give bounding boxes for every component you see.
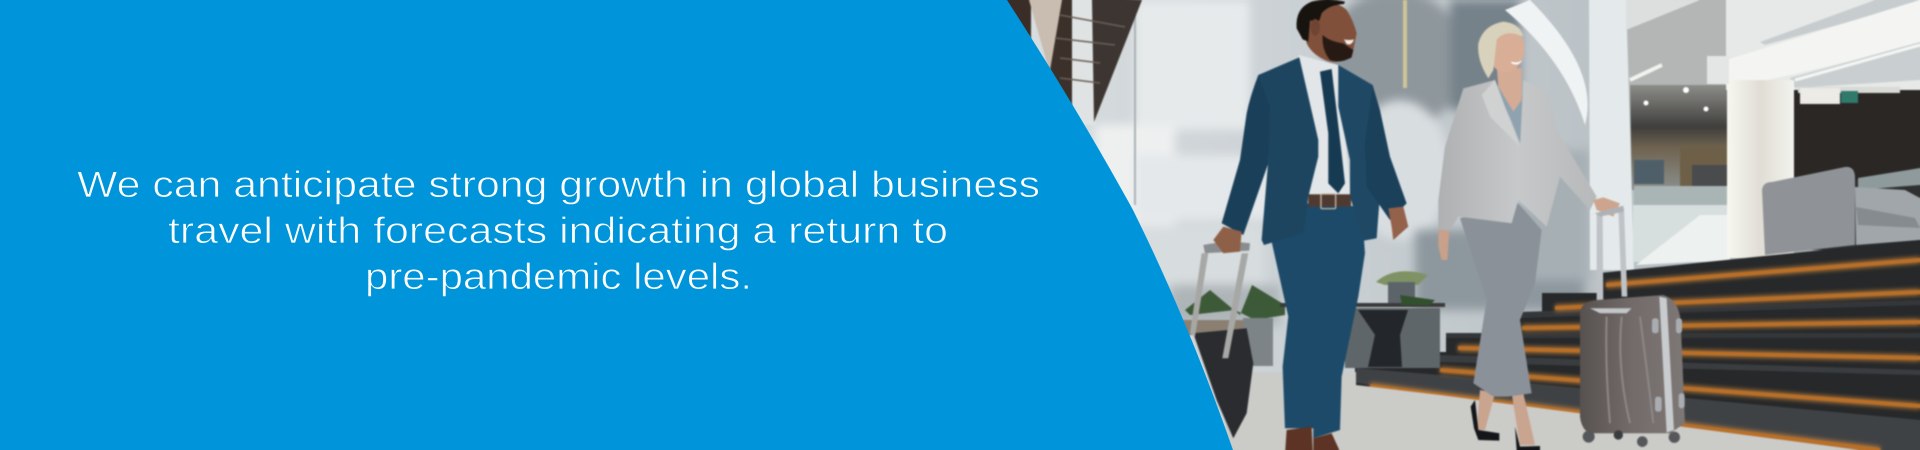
woman's suitcase xyxy=(1580,206,1685,447)
blazer xyxy=(1438,80,1597,230)
interior room behind xyxy=(1626,0,1730,265)
polished floor xyxy=(1225,372,1860,450)
glass wall reflections xyxy=(1095,0,1590,325)
blouse xyxy=(1497,85,1525,147)
man's suitcase xyxy=(1190,242,1253,438)
sleeves xyxy=(1222,75,1270,235)
lobby pillar xyxy=(1589,0,1634,270)
hands xyxy=(1593,197,1620,217)
grey sofa xyxy=(1762,167,1920,255)
neck xyxy=(1497,65,1522,112)
stairs with orange lighting xyxy=(1355,240,1920,450)
shoes xyxy=(1285,427,1339,450)
legs and shoes xyxy=(1477,390,1535,445)
jacket xyxy=(1258,57,1318,245)
trousers xyxy=(1272,203,1365,438)
shirt xyxy=(1298,55,1351,195)
white ceiling and column xyxy=(1707,0,1920,258)
headline text xyxy=(77,164,1040,297)
tie and belt xyxy=(1320,69,1345,193)
headline text: We can anticipate strong growth in global business xyxy=(77,164,1040,205)
photo: business travellers walking through a hotel lobby xyxy=(1000,0,1920,450)
trousers xyxy=(1460,203,1542,397)
panel: blue angled text panel xyxy=(0,0,1233,450)
headline text: travel with forecasts indicating a return to xyxy=(168,210,948,251)
woman in grey suit xyxy=(1438,22,1620,450)
plants and furniture left of man xyxy=(1180,271,1445,370)
hands xyxy=(1213,227,1242,253)
head xyxy=(1306,3,1357,62)
man in navy suit xyxy=(1213,0,1408,450)
architecture top-left: beam and blinds xyxy=(1005,0,1142,130)
headline text: pre-pandemic levels. xyxy=(365,256,752,297)
head and hair xyxy=(1487,24,1524,72)
